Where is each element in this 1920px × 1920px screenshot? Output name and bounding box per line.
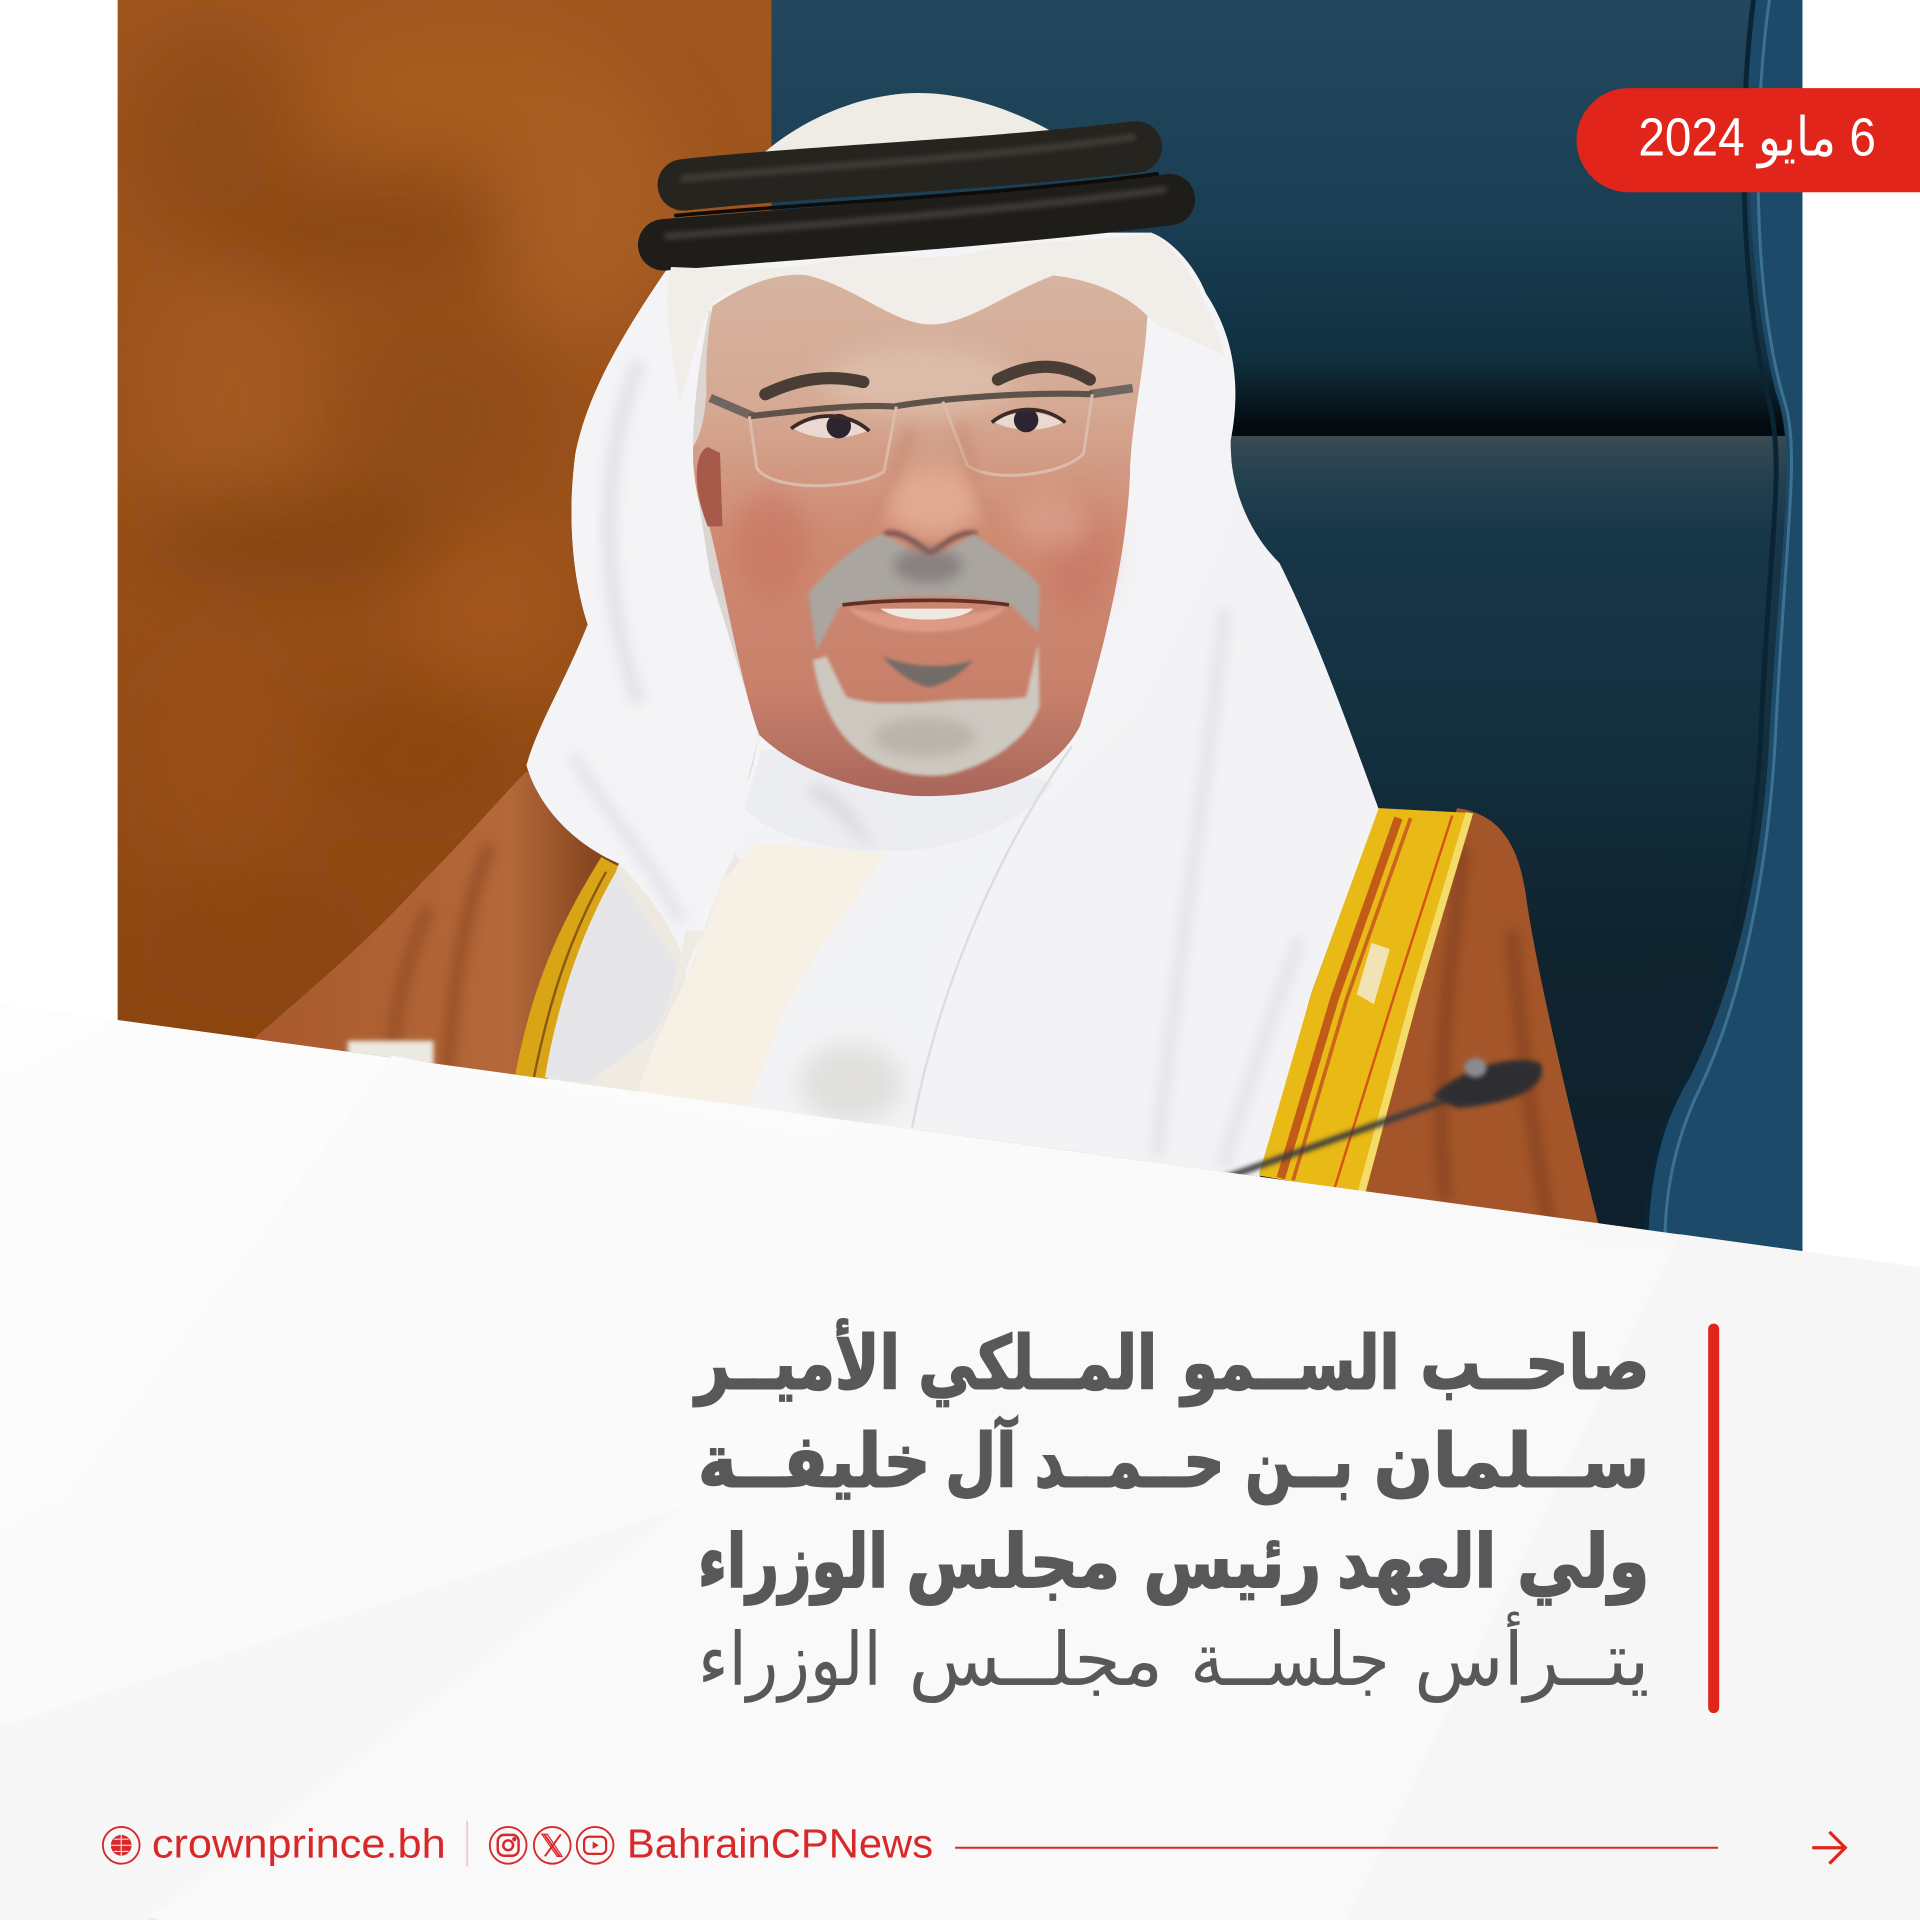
- headline line 3: مجلس: [906, 1520, 1120, 1605]
- thobe side fold: [545, 872, 683, 1082]
- headline line 4: يتــرأس: [1414, 1611, 1649, 1703]
- headline line 1: الســمو: [1178, 1322, 1400, 1407]
- date badge: [1577, 88, 1920, 192]
- right robe: [1335, 808, 1602, 1237]
- cheeks and highlights: [735, 345, 1112, 612]
- left robe shading: [392, 845, 490, 1078]
- arrow: [1812, 1832, 1845, 1864]
- moustache and goatee: [808, 534, 1040, 776]
- agal black cord: [664, 137, 1169, 245]
- wood wall background: [118, 0, 779, 1053]
- sash texture: [800, 1044, 902, 1123]
- thobe side lower: [652, 930, 704, 1035]
- website text: crownprince.bh: [152, 1821, 446, 1867]
- headline line 2: ســلمان: [1374, 1420, 1649, 1505]
- headline line 2: حــمــد: [1035, 1420, 1224, 1505]
- eyes: [791, 408, 1065, 438]
- headline line 4: [698, 1611, 1649, 1703]
- chair back upper cushion: [771, 0, 1802, 438]
- sash flap: [748, 1048, 911, 1129]
- icon: instagram: [490, 1827, 527, 1864]
- thobe cream placket: [686, 842, 886, 1106]
- headline line 4: مجلــس: [909, 1618, 1163, 1703]
- headline line 4: الوزراء: [698, 1618, 882, 1703]
- faint diagonal facets: [0, 1056, 1224, 1920]
- lower white panel: [0, 1004, 1920, 1920]
- left trim stitching: [534, 872, 606, 1078]
- headline line 2: آل: [945, 1416, 1018, 1505]
- headline line 4: جلســة: [1190, 1618, 1390, 1703]
- headdress inner shadow beside face: [693, 306, 760, 784]
- microphone: [1224, 1058, 1542, 1178]
- thobe base: [548, 853, 804, 1114]
- right robe fold: [1442, 845, 1549, 1224]
- chair back lower cushion: [771, 436, 1802, 1269]
- headline line 2: بــن: [1245, 1420, 1353, 1505]
- headline block: [692, 1319, 1719, 1713]
- social handle text: BahrainCPNews: [627, 1821, 933, 1867]
- headline line 1: [692, 1319, 1649, 1407]
- headline line 1: الأميــر: [692, 1319, 900, 1407]
- footer: [103, 1821, 1845, 1867]
- nose: [872, 422, 994, 553]
- headdress front fold: [667, 233, 1224, 404]
- glasses: [710, 388, 1133, 486]
- date text: 6 مايو 2024: [1638, 108, 1876, 169]
- footer rule: [955, 1847, 1718, 1849]
- headline line 1: صاحــب: [1420, 1322, 1649, 1407]
- headdress upper body: [527, 233, 1235, 980]
- blurred glass on desk: [348, 1041, 433, 1078]
- eyebrows: [765, 367, 1090, 394]
- headline line 3: العهد: [1337, 1520, 1496, 1605]
- icon: globe: [103, 1827, 140, 1864]
- headline line 3: [698, 1520, 1649, 1606]
- face: [693, 275, 1147, 796]
- footer divider: [466, 1821, 468, 1866]
- photo: portrait in a council chair: [118, 0, 1812, 1269]
- neck collar: [744, 749, 1053, 851]
- headline line 2: خليفــة: [698, 1420, 931, 1505]
- headline line 2: [698, 1416, 1649, 1505]
- headdress top dome: [765, 93, 1050, 152]
- headline line 3: الوزراء: [698, 1520, 888, 1605]
- white headdress and sash mass: [527, 263, 1379, 1182]
- headline line 3: ولي: [1517, 1520, 1649, 1606]
- icon: x: [534, 1827, 571, 1864]
- left robe: [251, 771, 618, 1090]
- red accent bar: [1708, 1324, 1719, 1713]
- icon: youtube: [577, 1827, 613, 1864]
- headline line 1: المــلكي: [918, 1322, 1157, 1407]
- left gold trim: [514, 857, 620, 1084]
- chair right edge piping: [1646, 0, 1812, 1261]
- right gold trim: [1259, 808, 1473, 1194]
- headline line 3: رئيس: [1144, 1520, 1321, 1605]
- collar shadow: [810, 786, 865, 838]
- headdress shading: [576, 367, 1298, 1163]
- ear: [697, 447, 722, 527]
